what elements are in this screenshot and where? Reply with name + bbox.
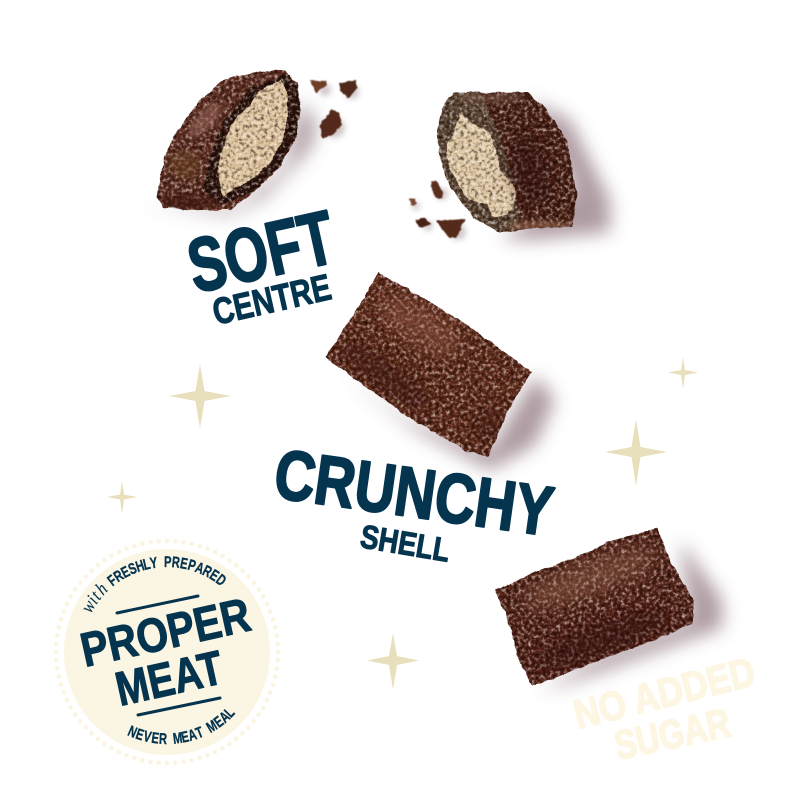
badge arc text top: P xyxy=(186,556,198,575)
badge arc text top: R xyxy=(111,566,127,585)
sparkle: bottom centre xyxy=(367,633,419,690)
badge arc text top: F xyxy=(104,572,120,589)
callout: no added sugar xyxy=(569,648,760,769)
badge arc text top: P xyxy=(164,553,172,570)
badge arc text top xyxy=(76,553,230,616)
badge arc text top: D xyxy=(213,571,230,589)
badge bottom rule xyxy=(138,698,220,715)
badge arc text bottom: L xyxy=(221,704,238,721)
badge arc text bottom: A xyxy=(216,708,233,726)
badge arc text bottom: E xyxy=(134,725,146,744)
badge arc text bottom: M xyxy=(203,717,220,736)
badge arc text top: S xyxy=(126,559,139,578)
sparkle: right small xyxy=(668,357,698,389)
text: CENTRE: CENTRE xyxy=(209,266,335,333)
text: SOFT: SOFT xyxy=(180,195,342,310)
badge: proper meat xyxy=(56,541,278,763)
badge arc text top: Y xyxy=(149,554,159,572)
badge arc text top: R xyxy=(171,553,181,571)
badge arc text top: t xyxy=(86,586,106,604)
badge arc text top: L xyxy=(141,555,152,573)
sparkle: left large xyxy=(169,364,231,429)
badge arc text top: E xyxy=(207,566,222,585)
badge arc text top: E xyxy=(118,563,133,581)
text: SHELL: SHELL xyxy=(358,517,453,569)
badge arc text top: R xyxy=(200,562,215,581)
badge text: PROPER: PROPER xyxy=(76,589,255,678)
kibble: whole crunchy centre xyxy=(325,273,555,470)
text: CRUNCHY: CRUNCHY xyxy=(270,435,558,551)
heading: crunchy shell xyxy=(270,435,558,569)
text: SUGAR: SUGAR xyxy=(610,699,734,769)
text: NO ADDED: NO ADDED xyxy=(569,648,760,738)
badge arc text bottom: E xyxy=(150,729,160,747)
badge arc text top: h xyxy=(91,578,112,599)
crumbs: top centre xyxy=(310,80,359,138)
badge arc text top: i xyxy=(82,591,102,608)
heading: soft centre xyxy=(180,195,342,333)
badge text: MEAT: MEAT xyxy=(111,642,228,717)
badge arc text bottom: M xyxy=(172,729,183,747)
badge arc text bottom xyxy=(125,704,238,748)
kibble: whole crunchy bottom right xyxy=(495,528,722,692)
badge disc xyxy=(64,549,270,755)
badge arc text bottom: V xyxy=(142,727,153,746)
badge arc text bottom: E xyxy=(180,728,190,746)
badge arc text bottom: A xyxy=(186,726,199,744)
badge arc text top: E xyxy=(179,554,189,573)
badge arc text top: w xyxy=(76,596,100,616)
badge arc text bottom: T xyxy=(193,723,206,742)
badge arc text top: H xyxy=(133,557,146,575)
kibble: broken piece, soft centre left xyxy=(150,70,318,214)
badge arc text bottom: R xyxy=(159,730,168,748)
badge dotted ring xyxy=(56,541,278,763)
crumbs: bottom left of right piece xyxy=(409,181,466,240)
badge top rule xyxy=(117,596,198,613)
sparkle: left small xyxy=(107,481,137,514)
badge arc text bottom: E xyxy=(211,713,227,731)
badge arc text bottom: N xyxy=(125,722,140,741)
badge arc text top: A xyxy=(193,559,207,578)
sparkle: right large xyxy=(605,419,667,486)
kibble: broken piece, soft centre right xyxy=(437,92,610,240)
